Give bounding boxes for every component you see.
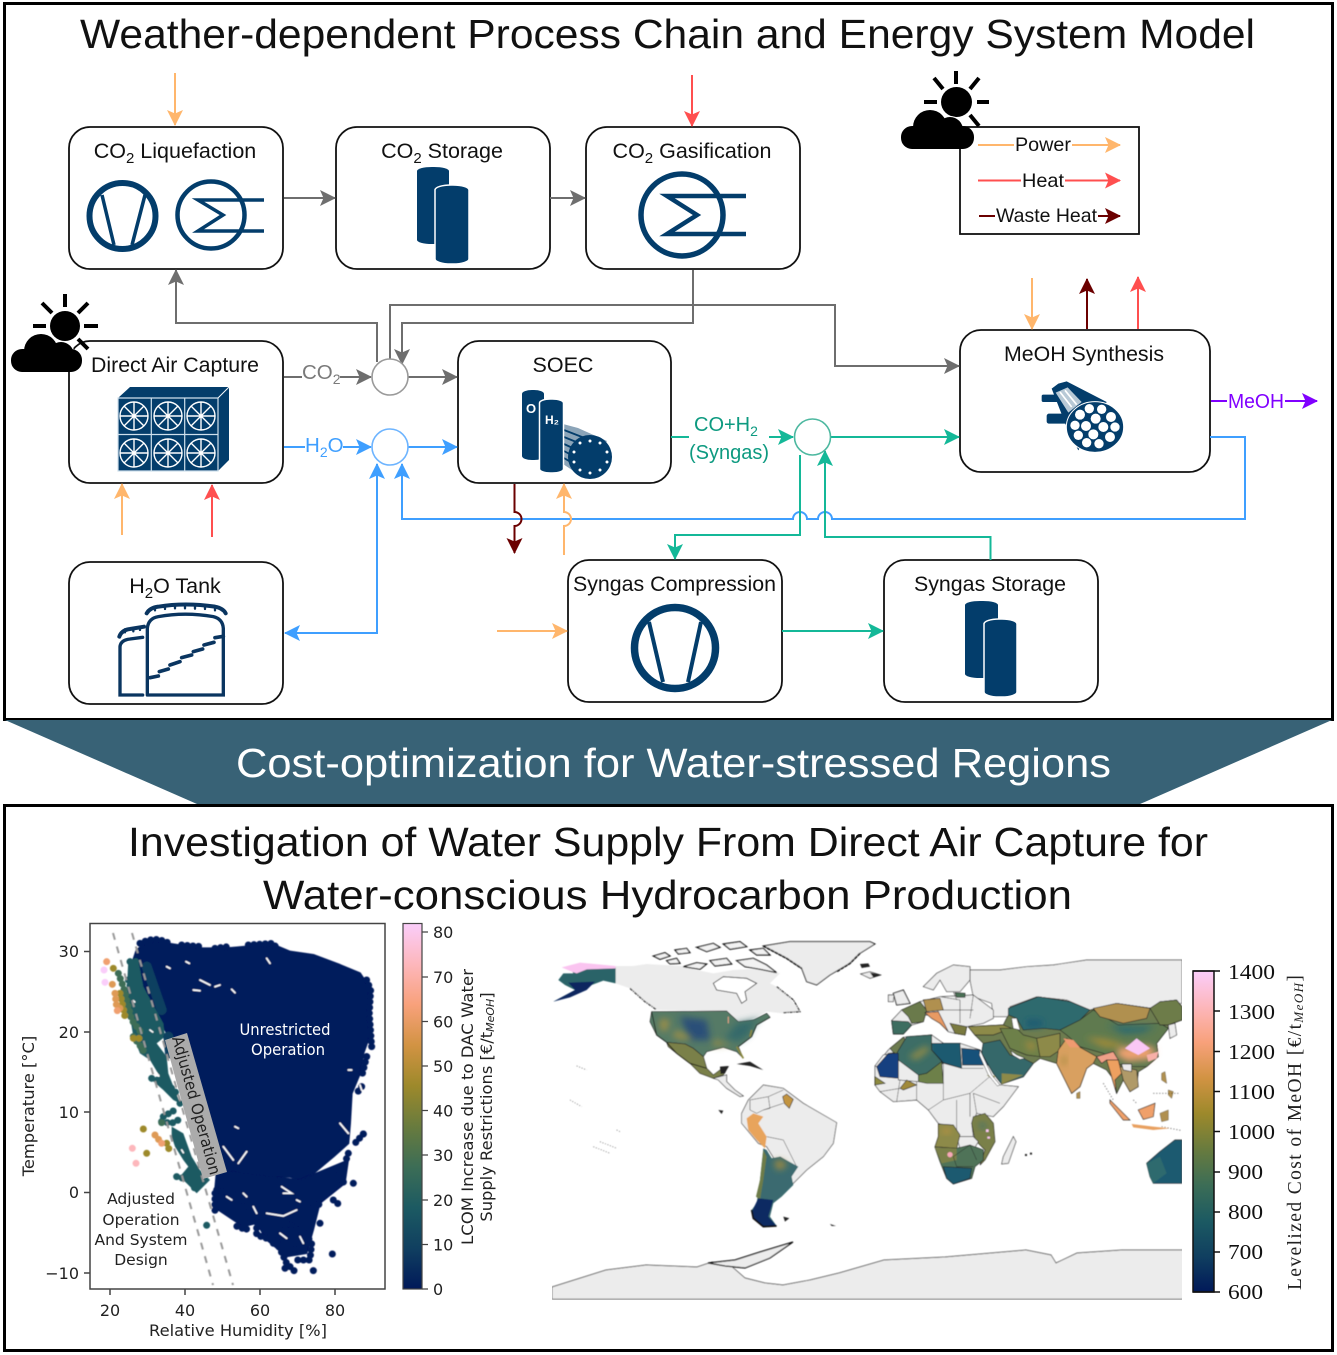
icon: MeOH reactor bbox=[1042, 381, 1124, 452]
title: investigation: Water-conscious Hydrocarbon Production bbox=[263, 872, 1072, 918]
axis tick labels: 0 bbox=[69, 1183, 79, 1202]
process: CO2 Liquefaction: CO bbox=[94, 139, 126, 163]
icon: sun and cloud over legend bbox=[901, 71, 989, 149]
process: CO2 Storage: 2 bbox=[413, 150, 422, 167]
Southern Africa bbox=[972, 1113, 995, 1165]
process: CO2 Liquefaction: 2 bbox=[126, 150, 134, 167]
label: adjusted operation and system design: Design bbox=[114, 1251, 168, 1269]
process: Syngas Storage: Syngas Storage bbox=[914, 572, 1066, 596]
process: H2O Tank: H bbox=[129, 574, 145, 598]
legend: energy flows: Heat bbox=[1022, 170, 1065, 192]
icon: SOEC stack: O bbox=[526, 401, 536, 416]
colorbar: LCOM increase bbox=[403, 923, 453, 1299]
flows: syngas teal lines: CO+H bbox=[694, 414, 750, 436]
axis title: humidity: Relative Humidity [%] bbox=[149, 1321, 327, 1340]
process: CO2 Liquefaction: Liquefaction bbox=[134, 139, 256, 163]
chart: temperature vs humidity scatter bbox=[19, 923, 497, 1340]
title: process chain: Weather-dependent Process Chain and Energy System Model bbox=[80, 11, 1255, 57]
mixer: CO2 junction bbox=[372, 359, 408, 395]
axis tick labels: 10 bbox=[59, 1103, 79, 1122]
colorbar title: levelized cost: MeOH bbox=[1291, 982, 1306, 1024]
flows: syngas teal lines: 2 bbox=[750, 423, 758, 439]
panel: process chain and energy system bbox=[4, 4, 1332, 720]
flows: water blue lines: O bbox=[328, 434, 344, 457]
process: CO2 Storage: Storage bbox=[422, 139, 503, 163]
flows: water blue lines: H bbox=[305, 434, 320, 457]
axis title: temperature: Temperature [°C] bbox=[19, 1036, 38, 1177]
colorbar: levelized cost: 800 bbox=[1228, 1200, 1263, 1224]
Middle East bbox=[968, 1025, 1012, 1035]
flows: water blue lines bbox=[284, 433, 1245, 633]
colorbar: levelized cost: 1000 bbox=[1228, 1120, 1275, 1144]
map: Americas bbox=[553, 942, 875, 1227]
colorbar: levelized cost: 1100 bbox=[1228, 1080, 1275, 1104]
Central Asia bbox=[1008, 997, 1090, 1030]
colorbar title: ] bbox=[477, 992, 496, 999]
flows: water blue lines: 2 bbox=[320, 444, 328, 460]
icon: storage tanks bbox=[965, 601, 1017, 697]
legend: energy flows: Power bbox=[1015, 134, 1072, 156]
axis tick labels: −10 bbox=[45, 1264, 79, 1283]
axis tick labels: 20 bbox=[59, 1023, 79, 1042]
mixer: syngas junction bbox=[794, 419, 830, 455]
colorbar: LCOM increase: 50 bbox=[433, 1057, 453, 1076]
dashed boundaries bbox=[113, 933, 233, 1285]
process: CO2 Storage: CO bbox=[381, 139, 413, 163]
colorbar title: levelized cost: Levelized Cost of MeOH [€/t bbox=[1285, 1023, 1306, 1290]
axes box bbox=[84, 924, 385, 1295]
icon: SOEC stack: H₂ bbox=[545, 413, 559, 427]
legend: energy flows: Waste Heat bbox=[996, 205, 1098, 227]
label: unrestricted operation: Unrestricted bbox=[240, 1020, 330, 1039]
label: adjusted operation: Adjusted Operation bbox=[168, 1034, 225, 1177]
axis tick labels: 20 bbox=[100, 1301, 120, 1320]
process: SOEC bbox=[458, 341, 671, 483]
colorbar: levelized cost: 1200 bbox=[1228, 1040, 1275, 1064]
map: Antarctic peninsula bbox=[708, 1242, 793, 1268]
icon: DAC unit bbox=[118, 387, 229, 471]
label: unrestricted operation: Operation bbox=[251, 1040, 325, 1059]
label: adjusted operation and system design: Adjusted bbox=[107, 1190, 175, 1208]
process: Direct Air Capture: Direct Air Capture bbox=[91, 353, 259, 377]
process: SOEC: SOEC bbox=[533, 353, 593, 377]
flows: syngas teal lines: (Syngas) bbox=[689, 442, 769, 464]
icon: sun and cloud over DAC bbox=[11, 294, 98, 372]
map: Antarctica bbox=[552, 1250, 1185, 1299]
colorbar title: LCOM Increase due to DAC Water bbox=[458, 969, 477, 1245]
label: unrestricted operation bbox=[240, 1020, 330, 1059]
Australia bbox=[1147, 1140, 1182, 1183]
process: MeOH Synthesis bbox=[960, 330, 1210, 472]
process: H2O Tank: 2 bbox=[145, 585, 153, 602]
colorbar: levelized cost: 700 bbox=[1228, 1240, 1263, 1264]
flows: energy inputs and outputs: MeOH bbox=[1228, 391, 1284, 413]
process: Syngas Compression: Syngas Compression bbox=[573, 572, 776, 596]
colorbar: LCOM increase: 10 bbox=[433, 1236, 453, 1254]
process: CO2 Storage bbox=[336, 127, 550, 269]
colorbar title: MeOH bbox=[484, 999, 497, 1032]
icon: compressor bbox=[90, 183, 156, 249]
icon: water tanks bbox=[119, 604, 226, 695]
process: CO2 Liquefaction bbox=[69, 127, 283, 269]
label: adjusted operation and system design: Operation bbox=[102, 1211, 180, 1229]
data: unrestricted operation cloud bbox=[133, 939, 372, 1273]
flows: CO2 gray lines: CO bbox=[302, 361, 333, 384]
colorbar: LCOM increase: 30 bbox=[433, 1146, 453, 1165]
process: Syngas Storage bbox=[884, 560, 1098, 702]
map: levelized cost of methanol bbox=[552, 942, 1185, 1300]
map: Eurasia, Africa and Australia bbox=[860, 960, 1182, 1184]
process: CO2 Gasification: 2 bbox=[645, 150, 653, 167]
colorbar title bbox=[458, 969, 497, 1245]
flows: CO2 gray lines bbox=[176, 198, 959, 387]
process: MeOH Synthesis: MeOH Synthesis bbox=[1004, 342, 1164, 366]
China and Mongolia bbox=[1060, 1010, 1168, 1067]
axis tick labels: 30 bbox=[59, 942, 79, 961]
Asia base bbox=[968, 997, 1182, 1093]
banner: cost-optimization bbox=[5, 720, 1332, 804]
banner: cost-optimization: Cost-optimization for Water-stressed Regions bbox=[236, 740, 1111, 786]
colorbar: levelized cost bbox=[1193, 960, 1275, 1304]
colorbar: levelized cost: 1300 bbox=[1228, 1000, 1275, 1024]
icon: SOEC stack bbox=[522, 390, 612, 479]
process: H2O Tank: O Tank bbox=[153, 574, 221, 598]
colorbar title: levelized cost: ] bbox=[1285, 974, 1306, 982]
colorbar: LCOM increase: 20 bbox=[433, 1191, 453, 1210]
axis tick labels: 80 bbox=[325, 1301, 345, 1320]
flows: syngas teal lines bbox=[671, 412, 990, 631]
icon: heat exchanger bbox=[641, 174, 746, 256]
axis tick labels bbox=[45, 942, 345, 1320]
Africa base bbox=[875, 1035, 1018, 1137]
label: adjusted operation and system design: And System bbox=[94, 1231, 188, 1249]
panel: water supply investigation bbox=[4, 806, 1332, 1350]
flows: CO2 gray lines: 2 bbox=[333, 371, 341, 387]
colorbar: levelized cost: 900 bbox=[1228, 1160, 1263, 1184]
colorbar: LCOM increase: 0 bbox=[433, 1280, 443, 1299]
South Asia bbox=[1057, 1038, 1097, 1093]
Europe base bbox=[892, 995, 993, 1035]
mixer: water junction bbox=[372, 429, 408, 465]
colorbar title: Supply Restrictions [€/t bbox=[477, 1032, 496, 1222]
process: Direct Air Capture bbox=[69, 341, 283, 483]
process: CO2 Gasification: Gasification bbox=[653, 139, 771, 163]
axis tick labels: 40 bbox=[175, 1301, 195, 1320]
title: investigation bbox=[128, 819, 1208, 918]
process: H2O Tank bbox=[69, 562, 283, 704]
white gaps in cloud bbox=[167, 958, 362, 1243]
icon: storage tanks bbox=[417, 167, 469, 264]
icon: compressor bbox=[634, 608, 716, 688]
process: CO2 Gasification: CO bbox=[613, 139, 645, 163]
data: adjusted operation dots bbox=[104, 960, 210, 1225]
colorbar: LCOM increase: 60 bbox=[433, 1012, 453, 1032]
title: investigation: Investigation of Water Supply From Direct Air Capture for bbox=[128, 819, 1208, 865]
colorbar: LCOM increase: 70 bbox=[433, 968, 453, 987]
colorbar: levelized cost: 600 bbox=[1228, 1280, 1263, 1304]
axis tick labels: 60 bbox=[250, 1301, 270, 1320]
process: CO2 Gasification bbox=[586, 127, 800, 269]
process: Syngas Compression bbox=[568, 560, 782, 702]
colorbar: LCOM increase: 80 bbox=[433, 923, 453, 942]
label: adjusted operation and system design bbox=[94, 1190, 188, 1269]
colorbar: levelized cost: 1400 bbox=[1228, 960, 1275, 984]
colorbar: LCOM increase: 40 bbox=[433, 1102, 453, 1120]
flows: energy inputs and outputs bbox=[122, 73, 1317, 631]
icon: heat exchanger bbox=[178, 182, 264, 248]
legend: energy flows bbox=[960, 127, 1139, 234]
